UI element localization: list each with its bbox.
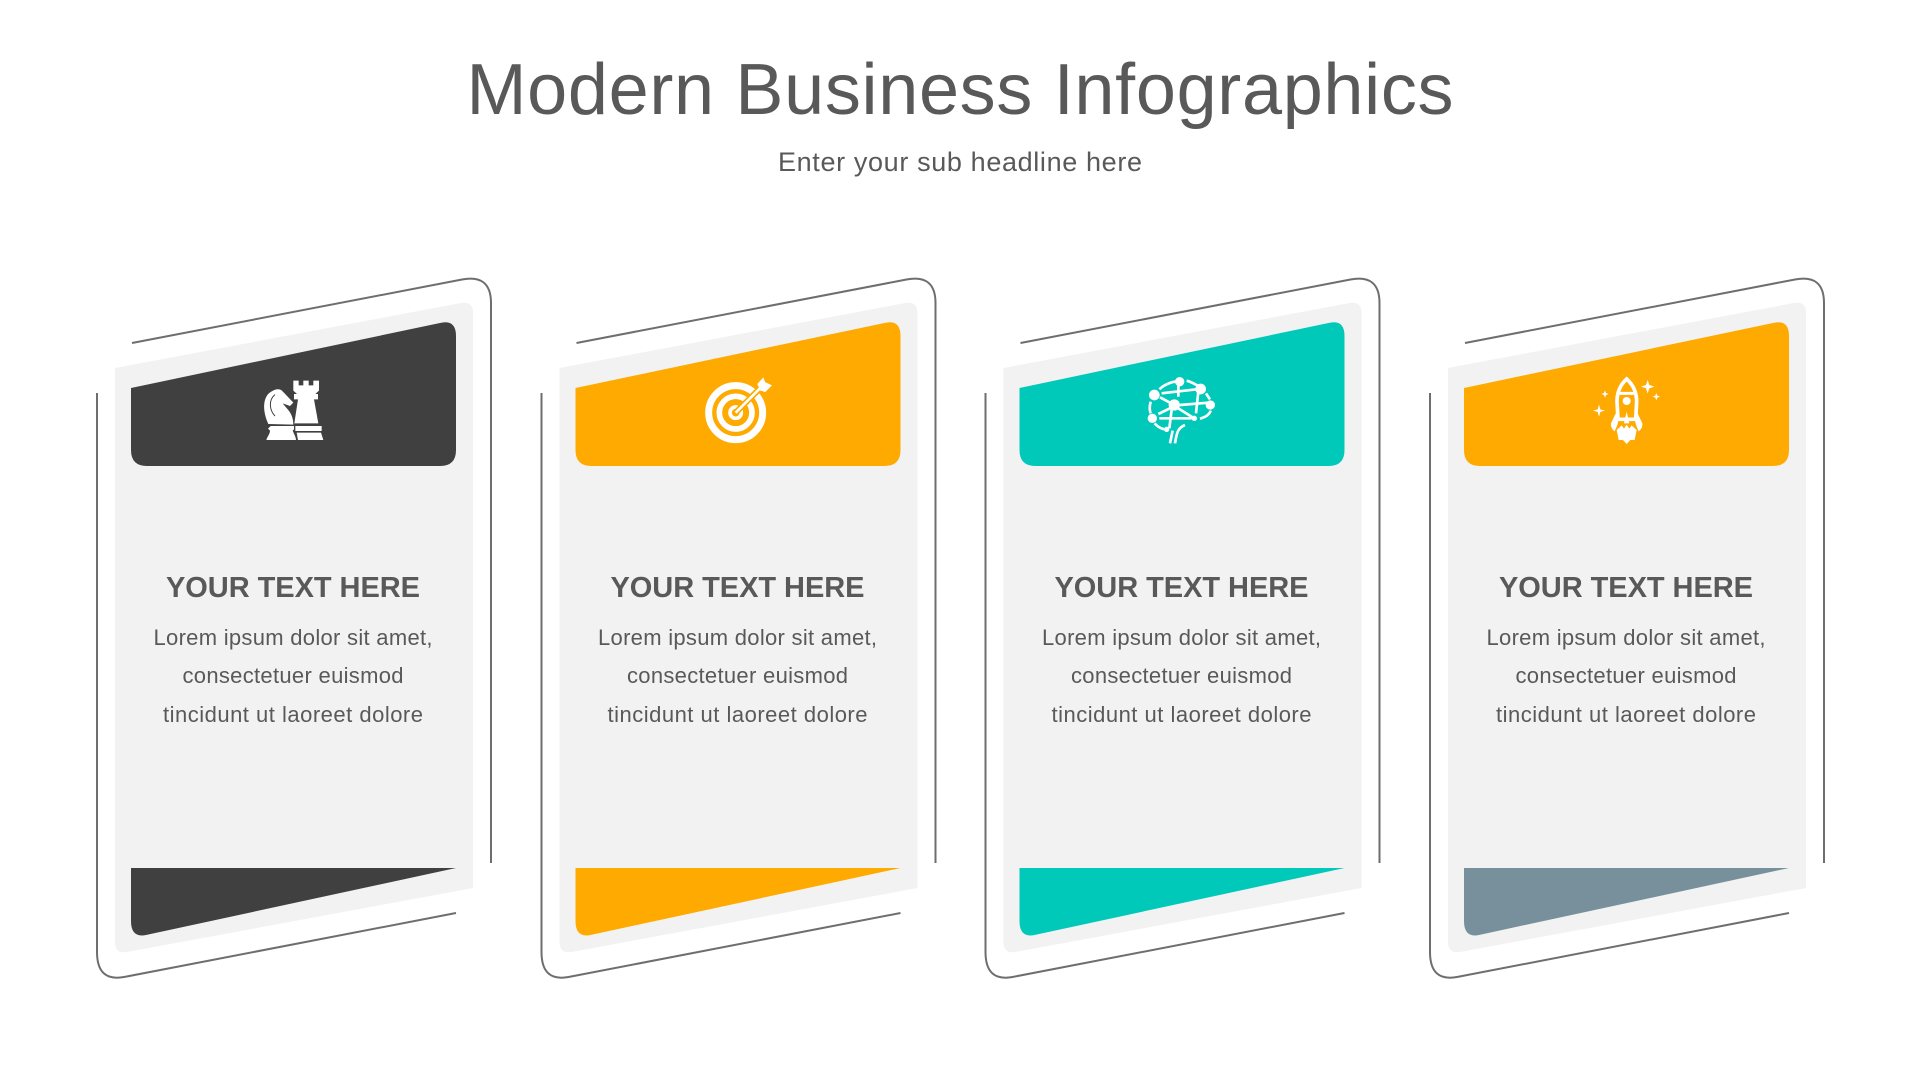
body text: Lorem ipsum dolor sit amet, <box>1042 625 1321 650</box>
body text: Lorem ipsum dolor sit amet, <box>598 625 877 650</box>
body text: consectetuer euismod <box>182 663 404 688</box>
body text: tincidunt ut laoreet dolore <box>1496 702 1756 727</box>
top colour band <box>576 322 900 466</box>
icon: brain network <box>1148 377 1215 443</box>
card background <box>115 303 473 952</box>
top colour band <box>131 322 456 466</box>
body text: consectetuer euismod <box>1516 663 1736 688</box>
heading: YOUR TEXT HERE <box>1054 572 1308 604</box>
outline top right <box>1020 279 1380 863</box>
outline bottom left <box>542 393 900 978</box>
card background <box>560 303 918 952</box>
outline bottom left <box>986 393 1344 978</box>
body text: Lorem ipsum dolor sit amet, <box>154 625 432 650</box>
body text: consectetuer euismod <box>627 663 848 688</box>
panel: card 3 <box>986 279 1380 978</box>
body text <box>1486 625 1766 727</box>
outline top right <box>1465 279 1824 863</box>
body text <box>1042 625 1321 727</box>
body text: consectetuer euismod <box>1071 663 1292 688</box>
title: Modern Business Infographics <box>466 50 1454 130</box>
body text: tincidunt ut laoreet dolore <box>1052 702 1312 727</box>
panel: card 2 <box>542 279 936 978</box>
panel: card 1 <box>97 279 491 978</box>
body text: tincidunt ut laoreet dolore <box>608 702 868 727</box>
outline bottom left <box>1430 393 1789 978</box>
bottom colour wedge <box>1020 868 1344 935</box>
panel: card 4 <box>1430 279 1824 978</box>
body text <box>154 625 432 727</box>
heading: YOUR TEXT HERE <box>1499 572 1753 604</box>
subtitle: Enter your sub headline here <box>778 147 1142 177</box>
heading: YOUR TEXT HERE <box>166 572 420 604</box>
card background <box>1004 303 1362 952</box>
icon: chess pieces <box>264 381 323 440</box>
body text <box>598 625 877 727</box>
top colour band <box>1020 322 1344 466</box>
bottom colour wedge <box>1464 868 1789 935</box>
outline bottom left <box>97 393 456 978</box>
icon: target with arrow <box>709 377 772 440</box>
bottom colour wedge <box>131 868 456 935</box>
outline top right <box>576 279 936 863</box>
heading: YOUR TEXT HERE <box>610 572 864 604</box>
outline top right <box>132 279 491 863</box>
icon: rocket with stars <box>1593 379 1660 444</box>
body text: tincidunt ut laoreet dolore <box>163 702 423 727</box>
bottom colour wedge <box>576 868 900 935</box>
body text: Lorem ipsum dolor sit amet, <box>1486 625 1766 650</box>
top colour band <box>1464 322 1789 466</box>
card background <box>1448 303 1806 952</box>
